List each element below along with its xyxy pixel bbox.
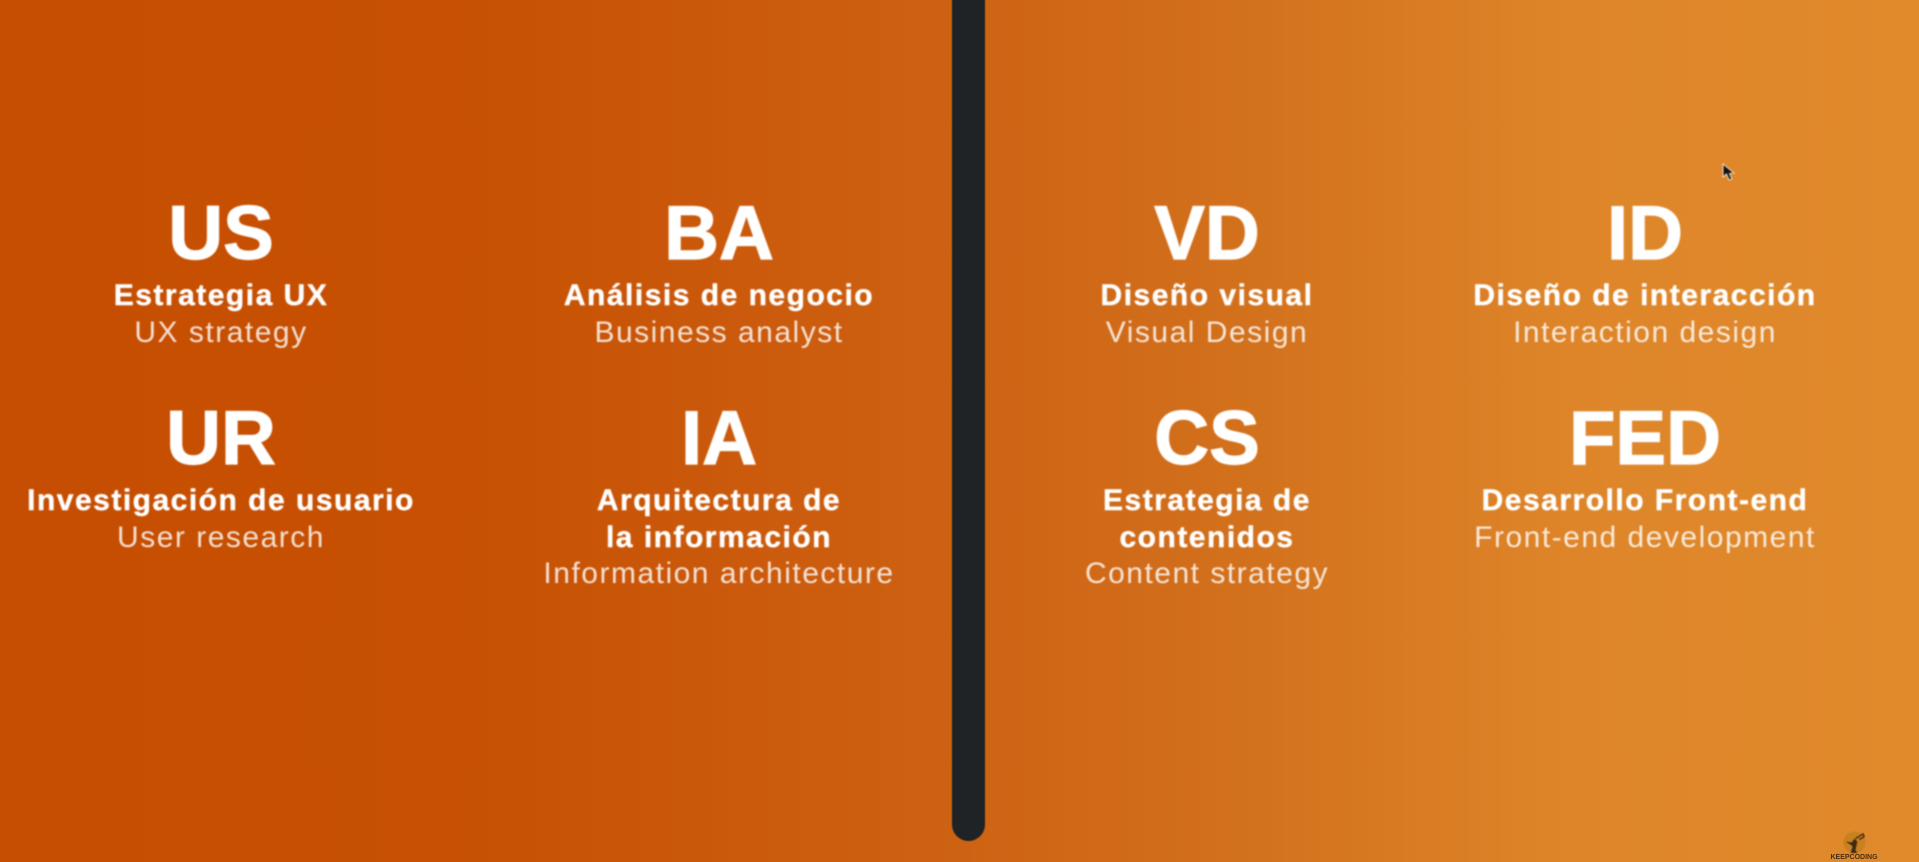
role name: Estrategia de	[1103, 484, 1311, 517]
role name in English: Business analyst	[594, 316, 844, 348]
icon: logo mark	[1844, 832, 1866, 854]
abbreviation: BA	[664, 191, 774, 276]
logo wordmark: KEEPCODING	[1830, 854, 1878, 861]
role: ID	[1473, 191, 1817, 349]
role: FED	[1474, 396, 1816, 554]
role name	[596, 484, 841, 554]
role: IA	[543, 396, 895, 590]
vertical divider bar	[952, 0, 985, 841]
role: BA	[564, 191, 874, 349]
role: UR	[27, 396, 415, 554]
role name: Diseño visual	[1101, 279, 1313, 312]
role name: Análisis de negocio	[564, 279, 874, 312]
role name: contenidos	[1119, 520, 1294, 554]
role name: Investigación de usuario	[27, 484, 415, 517]
role name in English: Content strategy	[1085, 557, 1329, 590]
role: VD	[1101, 191, 1313, 349]
role name: Diseño de interacción	[1473, 279, 1817, 312]
role name	[1103, 484, 1311, 554]
role: US	[114, 191, 328, 349]
icon: mouse cursor	[1722, 162, 1736, 182]
abbreviation: US	[168, 191, 274, 276]
role name in English: Front-end development	[1474, 520, 1816, 554]
abbreviation: IA	[681, 396, 757, 481]
role: CS	[1085, 396, 1329, 590]
role name in English: Information architecture	[543, 557, 895, 590]
abbreviation: CS	[1154, 396, 1260, 481]
role name in English: Visual Design	[1106, 316, 1308, 348]
role name in English: User research	[117, 520, 325, 554]
role name: Arquitectura de	[597, 484, 841, 517]
abbreviation: UR	[166, 396, 276, 481]
role name: Desarrollo Front-end	[1482, 484, 1808, 517]
role name: Estrategia UX	[114, 279, 328, 312]
logo: KeepCoding	[1830, 832, 1878, 861]
role name in English: UX strategy	[134, 316, 308, 348]
abbreviation: VD	[1154, 191, 1260, 276]
role name: la información	[606, 520, 832, 554]
role name in English: Interaction design	[1513, 316, 1777, 348]
abbreviation: ID	[1607, 191, 1683, 276]
abbreviation: FED	[1569, 396, 1721, 481]
